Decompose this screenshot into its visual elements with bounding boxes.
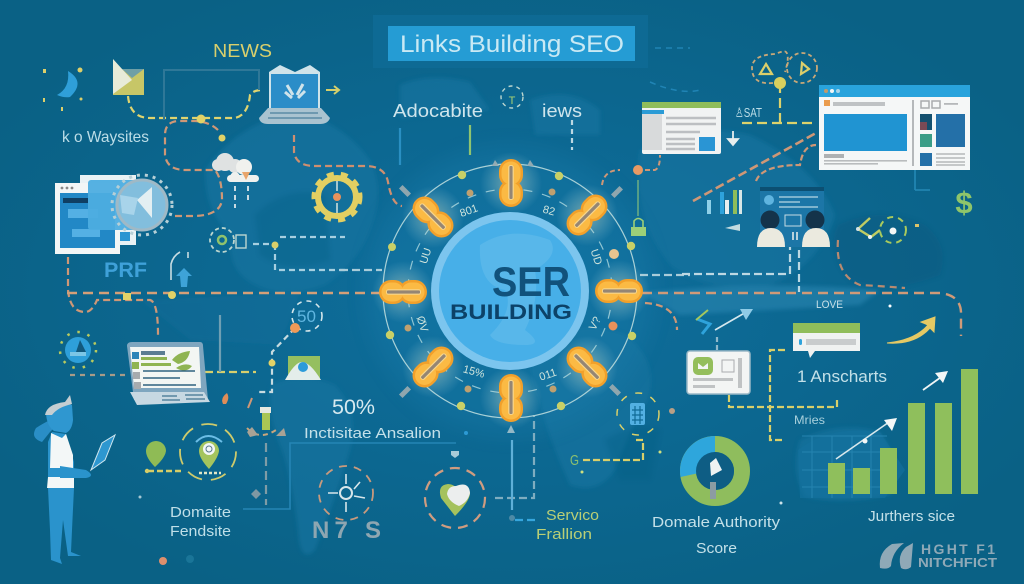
panel: laptop with dashboard (127, 342, 210, 405)
icon: cloud (212, 153, 259, 208)
central link wheel (372, 152, 650, 429)
label: domale authority score: Score (696, 540, 737, 557)
icon: people card (285, 356, 321, 380)
icon: blue arrow with runner (696, 309, 753, 334)
arrow: down (728, 131, 738, 145)
icon: heart ring (425, 451, 485, 528)
logo watermark: HGHT F1 (921, 541, 995, 557)
icon: node cluster (856, 217, 919, 243)
icon: calculator ring (617, 393, 675, 435)
icon: small bar cluster (707, 190, 742, 231)
chain links (372, 152, 650, 429)
panel: browser windows left (55, 175, 172, 254)
ring labels: 15% (462, 363, 486, 381)
label: domale authority score (652, 514, 781, 557)
logo watermark (880, 541, 997, 570)
head (46, 403, 73, 433)
icon: t ring (501, 86, 523, 108)
ring labels: 82 (541, 204, 556, 218)
arrow: laptop output (326, 86, 339, 94)
chart: grid backdrop (798, 430, 905, 498)
icon: sun ring (319, 466, 373, 520)
ring labels: 011 (538, 367, 558, 384)
route nodes (123, 114, 276, 366)
icon: crescent and sparks (43, 68, 82, 111)
label: service frallion (536, 507, 599, 543)
label: anscharts: 1 Anscharts (797, 367, 887, 386)
tablet (91, 435, 115, 470)
central halo (365, 146, 655, 436)
central globe badge: BUILDING (450, 301, 572, 324)
panel: message card (687, 351, 750, 394)
spoke nodes (404, 188, 619, 392)
darker map landmass (255, 192, 943, 480)
icon: linked dashed rings (752, 51, 817, 89)
central globe badge (431, 212, 589, 370)
label: domale authority score: Domale Authority (652, 514, 781, 531)
icon: laptop (259, 65, 330, 124)
label: mries: Mries (794, 413, 825, 427)
arrow: yellow curved (887, 317, 935, 343)
icon: gear (314, 174, 360, 220)
person with tablet (34, 395, 115, 564)
chart: donut authority (680, 436, 742, 499)
small diamond (251, 489, 261, 499)
ring nodes (386, 171, 636, 410)
icon: padlock (602, 155, 660, 236)
ponytail (34, 420, 58, 442)
icon: house marker (171, 252, 192, 287)
label: domaite fendsite: Domaite (170, 504, 231, 521)
ring labels: V? (587, 315, 604, 332)
label: news: NEWS (213, 41, 272, 61)
label: inctisitae ansalion: Inctisitae Ansalion (304, 425, 441, 442)
label: g: G (570, 452, 579, 469)
ring labels: 801 (458, 202, 480, 220)
label: iews: iews (542, 101, 582, 121)
vest (47, 433, 74, 488)
bar chart (828, 369, 978, 494)
torso (48, 432, 74, 488)
ring labels (414, 202, 604, 384)
hair (45, 395, 72, 415)
arrow: chart trend low (836, 418, 897, 459)
ring markers (399, 160, 623, 398)
icon: flame marker (222, 393, 228, 404)
central globe badge: SER (492, 258, 570, 305)
badge: 50: 50 (297, 307, 316, 326)
label: ko waysites: k o Waysites (62, 129, 149, 146)
icon: chat bubble (793, 323, 860, 358)
world map silhouette (140, 78, 896, 555)
label: service frallion: Frallion (536, 526, 592, 543)
badge: 50 (290, 301, 322, 333)
connector routes (67, 48, 961, 520)
icon: dashed target (210, 228, 278, 252)
icon: location pins (145, 424, 236, 480)
icon: envelope (113, 59, 144, 95)
arrow: up from service (507, 425, 515, 521)
label: 50 percent: 50% (332, 396, 375, 419)
label: 7 s: N7 S (312, 517, 381, 544)
label: jurthers sice: Jurthers sice (868, 508, 955, 525)
ring labels: UU (418, 247, 434, 265)
label: love: LOVE (816, 299, 843, 311)
panel: team at board (757, 187, 830, 247)
icon: green dollar: $ (955, 185, 973, 220)
label: domaite fendsite (170, 504, 231, 540)
label: sat: ♙SAT (735, 105, 762, 120)
icon: compass figure (247, 398, 286, 437)
label: service frallion: Servico (546, 507, 599, 524)
icon: t ring: T (509, 95, 516, 107)
title banner: Links Building SEO (400, 31, 624, 58)
title banner (373, 15, 648, 68)
label: adocabite: Adocabite (393, 101, 483, 121)
ring labels: UD (588, 248, 604, 267)
panel: large browser window (819, 85, 970, 170)
logo watermark: NITCHFICT (918, 555, 997, 570)
label: domaite fendsite: Fendsite (170, 523, 231, 540)
decorative dots (138, 304, 892, 565)
label: prf: PRF (104, 259, 147, 282)
icon: globe badge (60, 332, 96, 368)
ring labels: ØV (414, 315, 430, 334)
legs (48, 488, 81, 564)
panel: small browser window (642, 102, 721, 154)
arrow: chart trend high (923, 371, 948, 390)
arm (60, 466, 91, 478)
